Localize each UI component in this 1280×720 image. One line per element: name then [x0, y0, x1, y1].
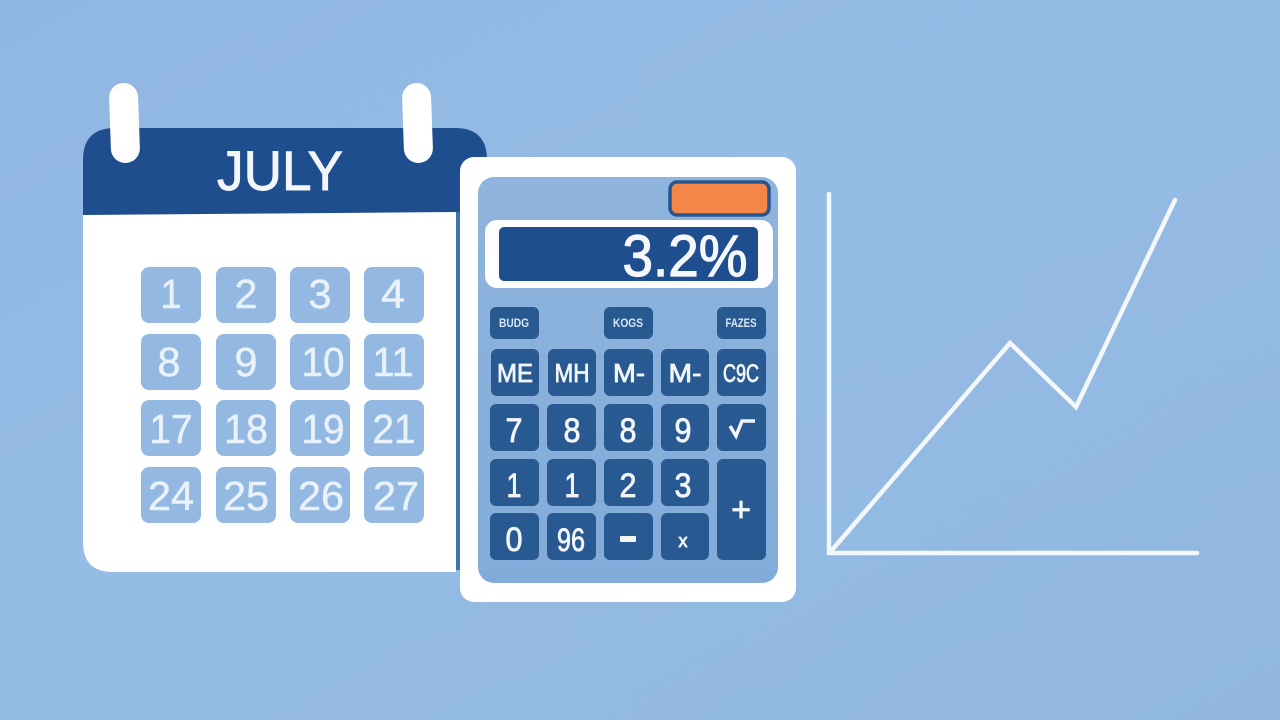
display: [485, 220, 773, 289]
keypad labels: 1: [506, 467, 522, 505]
date grid: 10: [302, 339, 344, 385]
keypad labels: [497, 358, 759, 559]
keypad: [490, 349, 766, 560]
keypad labels: C9C: [723, 360, 759, 388]
keypad labels: 3: [674, 467, 692, 505]
calendar shadow edge: [440, 205, 460, 570]
date grid: 2: [234, 271, 258, 317]
orange button: [670, 182, 769, 215]
calculator: [460, 157, 796, 602]
date grid: 27: [373, 473, 419, 519]
trend line: [832, 200, 1175, 550]
calculator casing: [460, 157, 796, 602]
keypad labels: 1: [564, 467, 580, 505]
date grid: 26: [298, 473, 344, 519]
date grid: 21: [372, 406, 416, 452]
date grid: 19: [302, 406, 344, 452]
keypad labels: x: [678, 531, 688, 551]
chart axes: [829, 194, 1197, 553]
calendar: [83, 83, 487, 572]
keypad labels: 8: [564, 412, 580, 450]
minus symbol: [620, 536, 636, 542]
date grid: 18: [224, 406, 268, 452]
keypad labels: 7: [506, 412, 522, 450]
keypad labels: M-: [668, 358, 702, 388]
date grid: 4: [381, 271, 405, 317]
calendar header: [83, 128, 487, 215]
calendar page: [83, 205, 456, 572]
keypad labels: 96: [557, 522, 585, 558]
keypad labels: M-: [613, 358, 645, 388]
keypad labels: 2: [620, 467, 636, 505]
month title: JULY: [217, 139, 343, 202]
function keys: [490, 307, 766, 339]
function key labels: BUDG: [499, 316, 529, 330]
function key labels: [499, 316, 756, 330]
date grid: 9: [234, 339, 258, 385]
function key labels: KOGS: [613, 316, 643, 330]
date grid: 17: [150, 406, 192, 452]
keypad labels: +: [731, 491, 751, 529]
binding ring left: [109, 83, 140, 163]
keypad labels: 0: [506, 521, 522, 559]
keypad labels: MH: [554, 358, 590, 388]
keypad labels: 9: [674, 412, 692, 450]
square root symbol: [730, 421, 755, 436]
display value: 3.2%: [622, 224, 748, 289]
date grid: 1: [160, 271, 182, 317]
date grid: 25: [223, 473, 269, 519]
date grid: [141, 267, 424, 523]
date grid: 11: [372, 339, 414, 385]
calculator face: [478, 177, 778, 583]
date grid: 3: [308, 271, 332, 317]
keypad labels: 8: [620, 412, 636, 450]
function key labels: FAZES: [726, 316, 756, 330]
keypad labels: ME: [497, 358, 533, 388]
date grid: 8: [158, 339, 180, 385]
line chart: [829, 194, 1197, 553]
binding ring right: [402, 83, 433, 163]
date grid: 24: [148, 473, 194, 519]
